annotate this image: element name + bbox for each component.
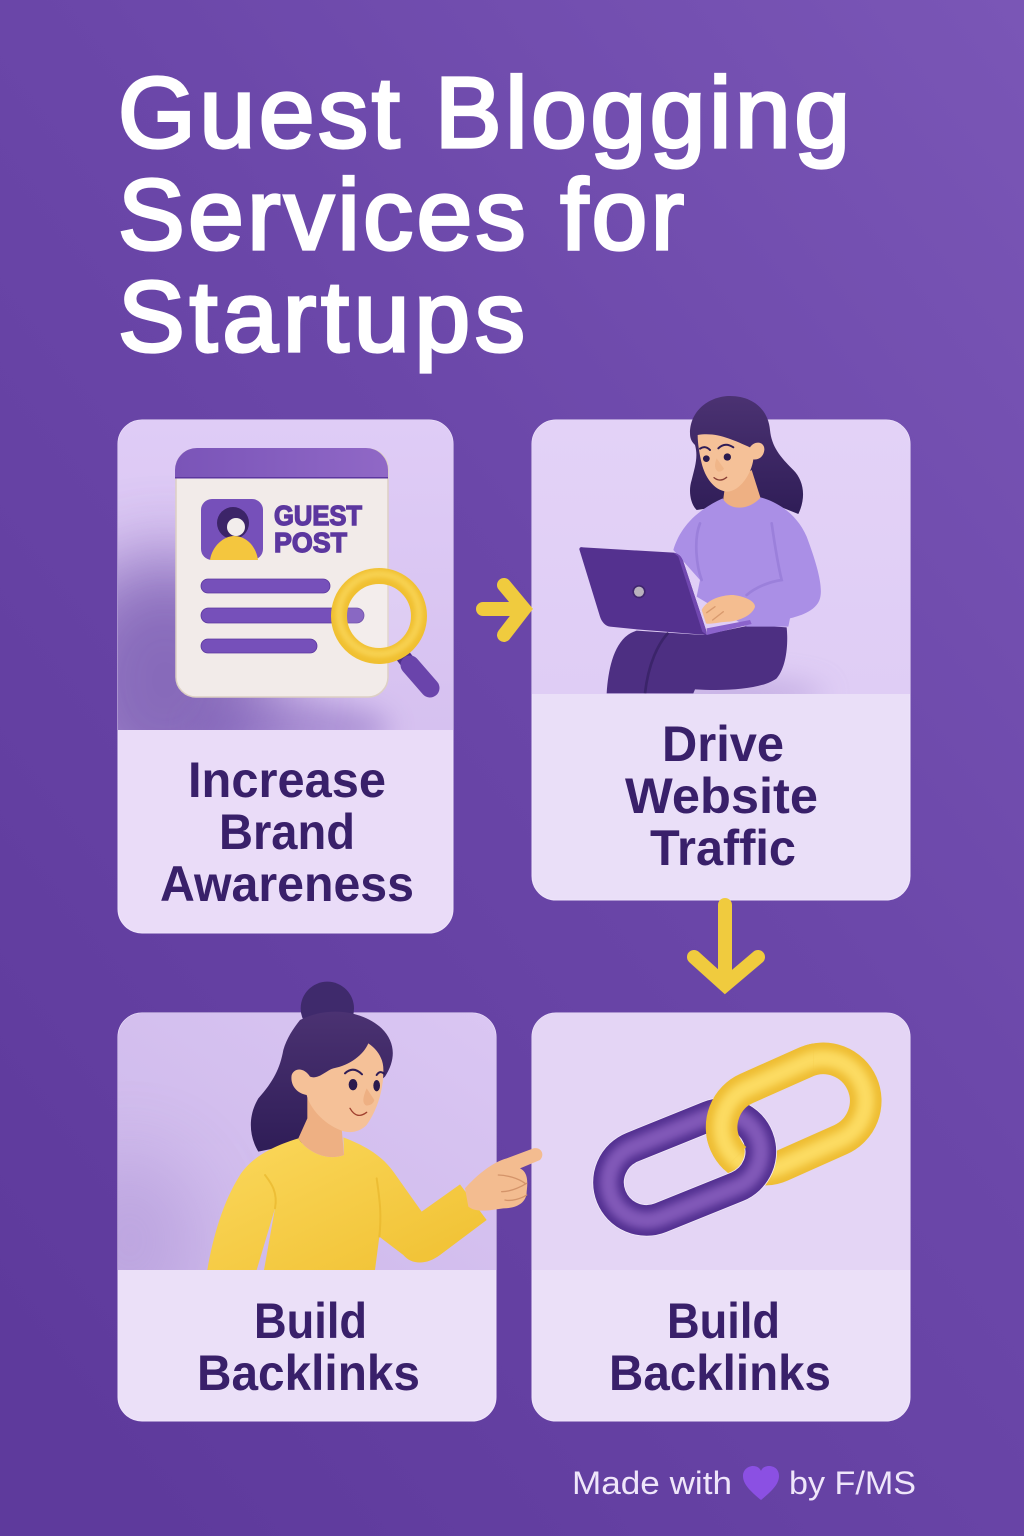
caption: Drive Website Traffic — [625, 716, 818, 876]
illustration: woman with laptop — [579, 396, 821, 693]
caption: Build Backlinks (left): Backlinks — [197, 1345, 420, 1401]
footer credit: by F/MS — [789, 1465, 916, 1501]
arrow: right — [483, 585, 524, 635]
illustration: woman pointing — [207, 982, 542, 1270]
panel: Build Backlinks (chain) — [532, 1013, 910, 1421]
title: Guest Blogging — [118, 57, 850, 169]
icon: heart — [743, 1466, 779, 1500]
panel: Build Backlinks (pointing woman) — [118, 982, 542, 1422]
caption: Increase Brand Awareness — [160, 752, 414, 912]
caption: Increase Brand Awareness: Increase — [188, 752, 386, 808]
title: Startups — [118, 261, 525, 373]
title — [118, 57, 850, 373]
caption: Increase Brand Awareness: Brand — [219, 804, 355, 860]
icon: guest post document — [175, 448, 388, 697]
icon: guest post document: GUEST — [274, 500, 362, 531]
panel: Drive Website Traffic — [532, 396, 910, 900]
caption: Increase Brand Awareness: Awareness — [160, 856, 414, 912]
caption: Build Backlinks (right) — [609, 1293, 831, 1401]
caption: Build Backlinks (left): Build — [254, 1293, 367, 1349]
caption: Build Backlinks (right): Build — [667, 1293, 780, 1349]
caption: Build Backlinks (left) — [197, 1293, 420, 1401]
icon: chain links — [597, 1045, 879, 1232]
caption: Drive Website Traffic: Website — [625, 768, 818, 824]
title: Services for — [118, 159, 684, 271]
footer credit — [572, 1465, 916, 1501]
panel: Increase Brand Awareness — [118, 420, 454, 934]
caption: Drive Website Traffic: Traffic — [650, 820, 796, 876]
icon: magnifying glass — [339, 574, 430, 688]
icon: guest post document: POST — [274, 527, 347, 558]
footer credit: Made with — [572, 1465, 732, 1501]
caption: Build Backlinks (right): Backlinks — [609, 1345, 831, 1401]
caption: Drive Website Traffic: Drive — [662, 716, 784, 772]
arrow: down — [694, 905, 758, 985]
